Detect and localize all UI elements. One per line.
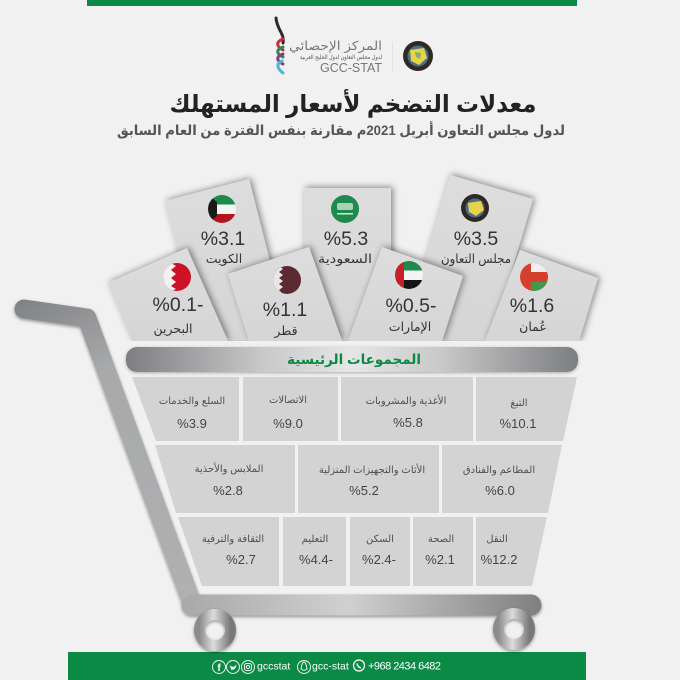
icon: whatsapp [354, 660, 364, 671]
cell: tobacco: %10.1 [500, 416, 536, 431]
cell: culture and recreation: %2.7 [226, 552, 256, 567]
icon: instagram [242, 660, 254, 674]
value: Bahrain: %0.1- [153, 294, 203, 316]
label: Kuwait: الكويت [206, 252, 242, 267]
icon: facebook: f [217, 663, 221, 674]
flag: Qatar [273, 266, 301, 294]
value: Saudi Arabia: %5.3 [324, 228, 368, 250]
panel: country cards [108, 175, 598, 341]
card: Oman [485, 250, 598, 341]
card: UAE [348, 247, 463, 341]
flag: Saudi Arabia [331, 195, 359, 223]
cart wheel right [498, 614, 530, 644]
label: UAE: الإمارات [389, 320, 431, 335]
cell: education [283, 517, 346, 586]
value: Kuwait: %3.1 [201, 228, 245, 250]
cell: food and beverages: %5.8 [393, 415, 423, 430]
cell: food and beverages [341, 377, 473, 441]
cell: culture and recreation [178, 517, 279, 586]
panel: groups grid [132, 377, 577, 586]
flag: UAE [395, 261, 423, 290]
cell: goods and services [132, 377, 239, 441]
card: GCC [401, 175, 533, 340]
cell: health [413, 517, 473, 586]
icon: snapchat [298, 660, 310, 674]
cell: furniture and household: %5.2 [349, 483, 379, 498]
cell: communications [243, 377, 338, 441]
handle: gcc-stat: gcc-stat [312, 660, 349, 672]
cell: tobacco [476, 377, 577, 441]
icon: facebook [212, 660, 226, 674]
GCC-STAT logo [276, 18, 433, 75]
cart frame [24, 309, 531, 605]
title: معدلات التضخم لأسعار المستهلك [170, 89, 536, 118]
label: Bahrain: البحرين [153, 322, 193, 337]
label: Saudi Arabia: السعودية [318, 252, 372, 267]
card: Qatar [228, 247, 342, 341]
cell: housing: السكن [366, 534, 394, 545]
cell: clothing and footwear [155, 445, 295, 513]
cell: education: %4.4- [299, 552, 333, 567]
value: GCC: %3.5 [454, 228, 498, 250]
heading text: المجموعات الرئيسية [287, 352, 421, 367]
footer contacts [212, 660, 441, 674]
cell: furniture and household: الأثاث والتجهيزات المنزلية [319, 463, 425, 476]
cell: health: الصحة [428, 534, 454, 545]
cell: communications: الاتصالات [269, 395, 307, 406]
flag: GCC [461, 194, 489, 222]
phone number: +968 2434 6482 [368, 660, 441, 672]
cell: housing [350, 517, 410, 586]
cell: goods and services: السلع والخدمات [159, 396, 225, 407]
value: UAE: %0.5- [386, 295, 436, 317]
cell: food and beverages: الأغذية والمشروبات [366, 394, 446, 407]
cart handle and side [24, 309, 192, 603]
flag: Oman [520, 263, 548, 291]
logo separator [392, 42, 393, 72]
card: Kuwait [165, 179, 290, 340]
label: Oman: عُمان [519, 320, 547, 334]
cell: tobacco: التبغ [510, 398, 528, 409]
cell: transport: النقل [486, 534, 508, 545]
value: Oman: %1.6 [510, 295, 554, 317]
cell: clothing and footwear: الملابس والأحذية [195, 462, 263, 475]
value: Qatar: %1.1 [263, 299, 307, 321]
cell: clothing and footwear: %2.8 [213, 483, 243, 498]
cell: health: %2.1 [425, 552, 455, 567]
cell: transport: %12.2 [481, 552, 517, 567]
cell: restaurants and hotels: المطاعم والفنادق [463, 465, 535, 476]
flag: Bahrain [163, 263, 191, 291]
cell: restaurants and hotels [442, 445, 562, 513]
icon: twitter [226, 660, 240, 674]
cell: culture and recreation: الثقافة والترفية [202, 534, 264, 545]
GCC emblem [403, 41, 433, 71]
logo name arabic: المركز الإحصائي [289, 39, 382, 54]
main groups heading pill [126, 347, 578, 372]
cell: education: التعليم [302, 534, 328, 545]
flag: Kuwait [208, 195, 236, 224]
logo ribbon [276, 18, 283, 73]
card: Saudi Arabia [304, 188, 391, 340]
subtitle: لدول مجلس التعاون أبريل 2021م مقارنة بنفس الفترة من العام السابق [117, 121, 565, 139]
cart base bar [192, 594, 531, 616]
handle: gccstat: gccstat [257, 660, 290, 672]
logo subtitle arabic: لدول مجلس التعاون لدول الخليج العربية [300, 54, 382, 61]
cell: transport [476, 517, 547, 586]
cart wheel left [200, 614, 230, 646]
cell: furniture and household [298, 445, 439, 513]
footer bar [68, 652, 586, 680]
card: Bahrain [108, 248, 228, 341]
label: Qatar: قطر [273, 324, 298, 339]
cell: goods and services: %3.9 [177, 416, 207, 431]
logo name latin: GCC-STAT [320, 61, 382, 75]
label: GCC: مجلس التعاون [441, 252, 511, 267]
cell: housing: %2.4- [362, 552, 396, 567]
cell: restaurants and hotels: %6.0 [485, 483, 515, 498]
top green bar [87, 0, 577, 6]
cell: communications: %9.0 [273, 416, 303, 431]
